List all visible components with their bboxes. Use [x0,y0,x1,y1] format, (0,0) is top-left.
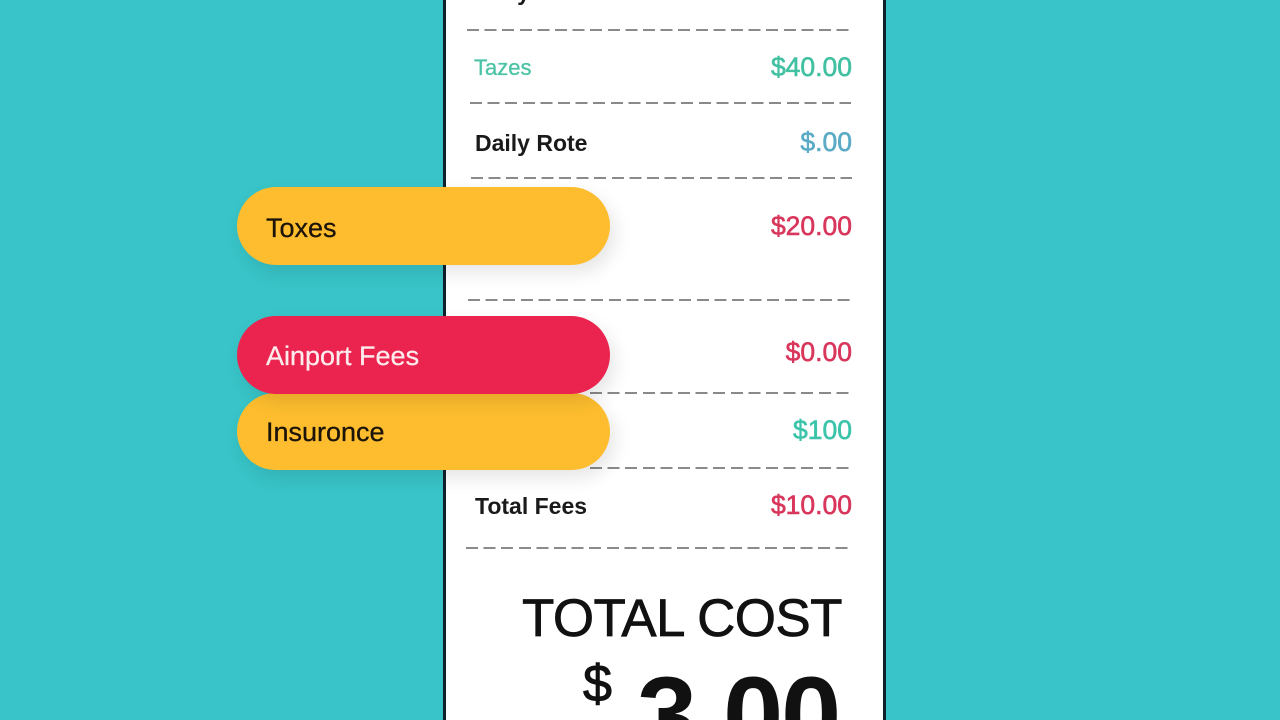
text: Taxes row label: Tazes [474,55,531,80]
text: Total Fees row label: Total Fees [475,493,587,519]
text: Insurance pill row amount: $100 [793,415,852,445]
text: Total Fees row amount: $10.00 [771,490,852,520]
panel: receipt [443,0,886,720]
text: Taxes pill row amount: $20.00 [771,211,852,241]
text: Daily Rate row label: Daily Rote [475,130,587,156]
pill: Airport Fees: Ainport Fees [266,341,419,371]
pill: Airport Fees [237,316,610,394]
pill: Insurance [237,393,610,470]
pill: Insurance: Insuronce [266,417,385,447]
pill: Taxes: Toxes [266,213,337,243]
text: Daily Rate row amount: $.00 [800,127,852,157]
pill: Taxes [237,187,610,265]
text: dollar sign: $ [583,655,612,713]
text: Airport Fees pill row amount: $0.00 [786,337,852,367]
text: Taxes row amount: $40.00 [771,52,852,82]
heading: total cost: TOTAL COST [522,589,842,648]
